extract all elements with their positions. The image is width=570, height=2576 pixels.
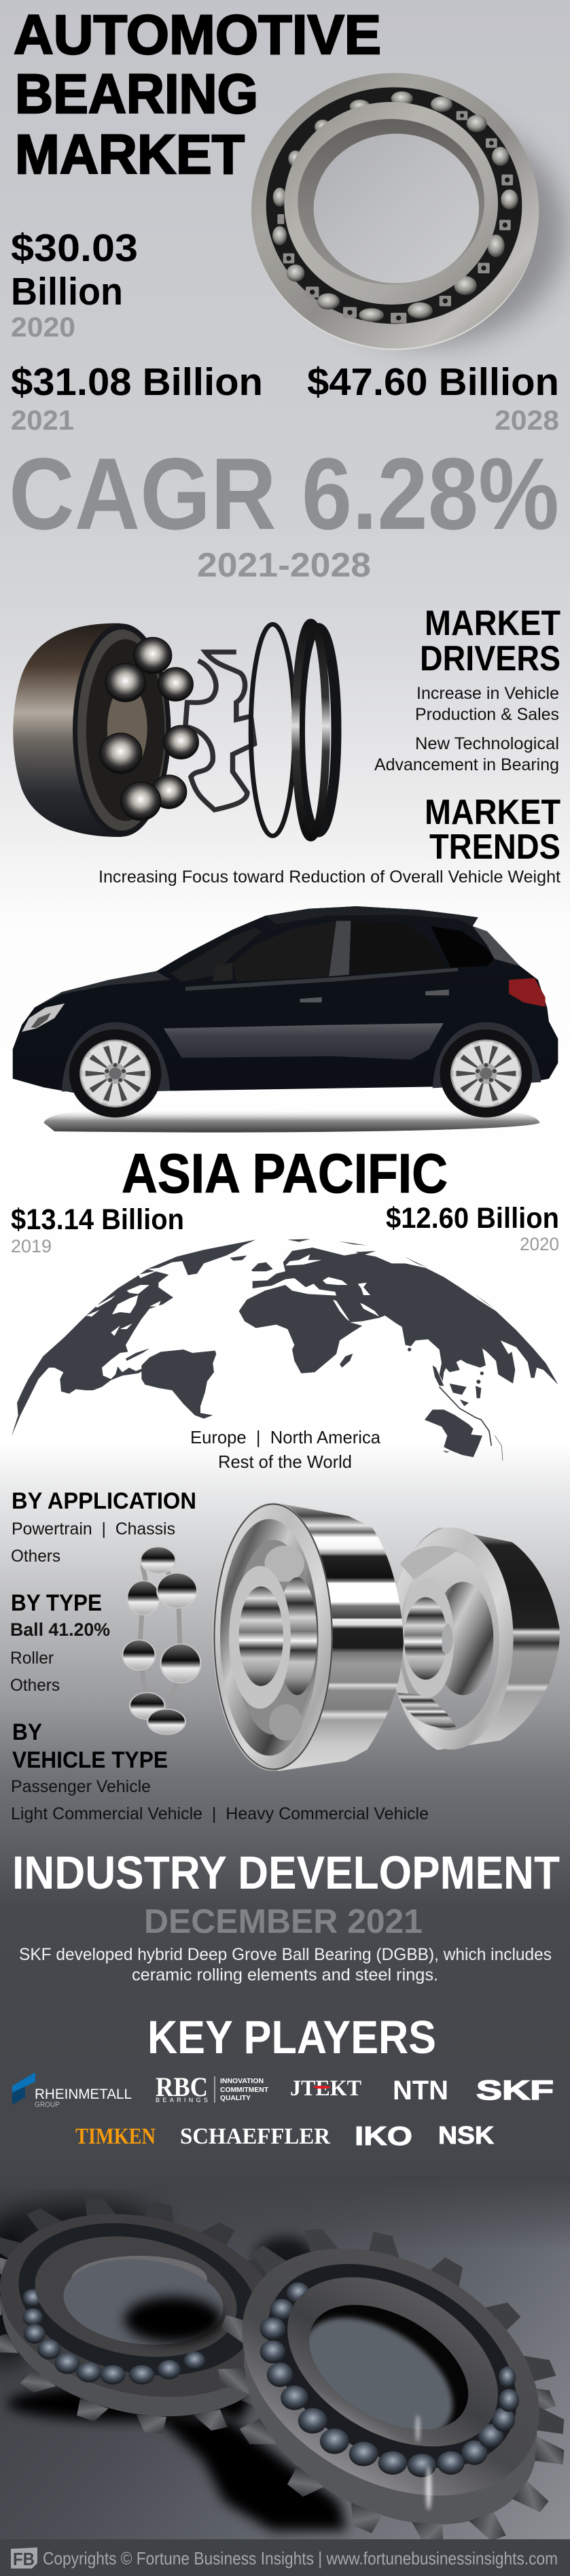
market size 2028: $47.60 Billion <box>307 360 559 404</box>
logo: Timken: TIMKEN <box>75 2124 156 2149</box>
segment: by type: Roller <box>10 1649 54 1668</box>
gears background <box>0 2176 570 2539</box>
segment: by application <box>11 1488 196 1566</box>
market drivers heading <box>420 604 560 679</box>
segment: by vehicle type: Light Commercial Vehicle | Heavy Commercial Vehicle <box>11 1804 429 1823</box>
heading: key players: KEY PLAYERS <box>147 2011 436 2063</box>
image: exploded bearing <box>13 623 336 838</box>
value 2020 <box>386 1202 559 1254</box>
logo: NSK: NSK <box>438 2121 494 2149</box>
segment: by type: Ball 41.20% <box>10 1619 110 1640</box>
image: left gear <box>0 2169 327 2462</box>
market trends heading <box>425 793 560 867</box>
title <box>14 4 381 186</box>
title: AUTOMOTIVE <box>14 4 381 66</box>
logo: RBC Bearings <box>156 2072 268 2103</box>
market trends text: Increasing Focus toward Reduction of Overall Vehicle Weight <box>99 868 560 887</box>
gear shadows <box>0 2204 346 2530</box>
logo: Schaeffler: SCHAEFFLER <box>180 2124 330 2149</box>
market size 2020: $30.03 <box>11 226 138 270</box>
segment: by application: BY APPLICATION <box>12 1488 196 1514</box>
market drivers list: New Technological <box>415 734 559 753</box>
market drivers list <box>374 684 559 774</box>
image: ball bearing photo <box>251 73 566 350</box>
segment: by type: BY TYPE <box>11 1590 102 1616</box>
image: ball cage <box>122 1547 200 1734</box>
other regions: Europe | North America <box>190 1427 381 1447</box>
other regions <box>190 1427 381 1472</box>
market drivers list: Production & Sales <box>415 705 559 724</box>
market size 2021: $31.08 Billion <box>11 360 263 404</box>
market drivers list: Increase in Vehicle <box>416 684 559 703</box>
world map <box>12 1239 558 1460</box>
CAGR: 2021-2028 <box>197 546 371 584</box>
logo: SKF: SKF <box>476 2076 554 2106</box>
logo: RBC Bearings: COMMITMENT <box>220 2086 268 2094</box>
logo: Rheinmetall: GROUP <box>35 2101 60 2109</box>
footer bar <box>0 2539 570 2576</box>
logo: RBC Bearings: QUALITY <box>220 2095 251 2102</box>
segment: by vehicle type: Passenger Vehicle <box>11 1777 151 1796</box>
market size 2028 <box>307 360 559 436</box>
image: right gear <box>218 2229 564 2539</box>
logo: IKO: IKO <box>355 2122 412 2151</box>
market size 2021 <box>11 360 263 436</box>
logo: JTEKT: JTEKT <box>290 2076 361 2101</box>
logo: Rheinmetall: RHEINMETALL <box>35 2086 132 2102</box>
logo: NTN: NTN <box>393 2076 448 2106</box>
development text: SKF developed hybrid Deep Grove Ball Bearing (DGBB), which includes <box>19 1945 552 1964</box>
logo: RBC Bearings: INNOVATION <box>220 2078 264 2085</box>
other regions: Rest of the World <box>218 1452 352 1472</box>
segment: by vehicle type: VEHICLE TYPE <box>12 1747 168 1773</box>
icon: Fortune Business Insights logo: FB <box>13 2549 35 2569</box>
market size 2020: 2020 <box>11 311 75 343</box>
image: black car <box>13 906 558 1133</box>
segment: by vehicle type: BY <box>12 1719 42 1745</box>
segment: by vehicle type <box>11 1719 429 1823</box>
value 2019: 2019 <box>11 1236 52 1256</box>
segment: by application: Others <box>11 1547 60 1566</box>
logo: RBC Bearings: BEARINGS <box>156 2097 208 2103</box>
image: large chrome bearing <box>213 1502 404 1771</box>
value 2020: $12.60 Billion <box>386 1202 559 1235</box>
development text <box>19 1945 552 1985</box>
title: MARKET <box>15 124 245 186</box>
value 2019: $13.14 Billion <box>11 1203 184 1236</box>
logo: Rheinmetall <box>12 2072 132 2109</box>
value 2020: 2020 <box>520 1234 559 1254</box>
image: second chrome bearing <box>389 1528 560 1750</box>
market size 2028: 2028 <box>495 405 559 436</box>
title: BEARING <box>15 63 258 125</box>
heading: Asia Pacific: ASIA PACIFIC <box>122 1143 448 1205</box>
segment: by application: Powertrain | Chassis <box>12 1519 175 1539</box>
market size 2020: Billion <box>11 270 123 313</box>
segment: by type <box>10 1590 110 1695</box>
market size 2021: 2021 <box>11 405 74 436</box>
logo: RBC Bearings: RBC <box>156 2072 208 2102</box>
date: DECEMBER 2021 <box>144 1902 423 1940</box>
market size 2020 <box>11 226 138 343</box>
value 2019 <box>11 1203 184 1256</box>
market drivers list: Advancement in Bearing <box>374 755 559 774</box>
development text: ceramic rolling elements and steel rings. <box>132 1965 438 1985</box>
segment: by type: Others <box>10 1676 60 1695</box>
